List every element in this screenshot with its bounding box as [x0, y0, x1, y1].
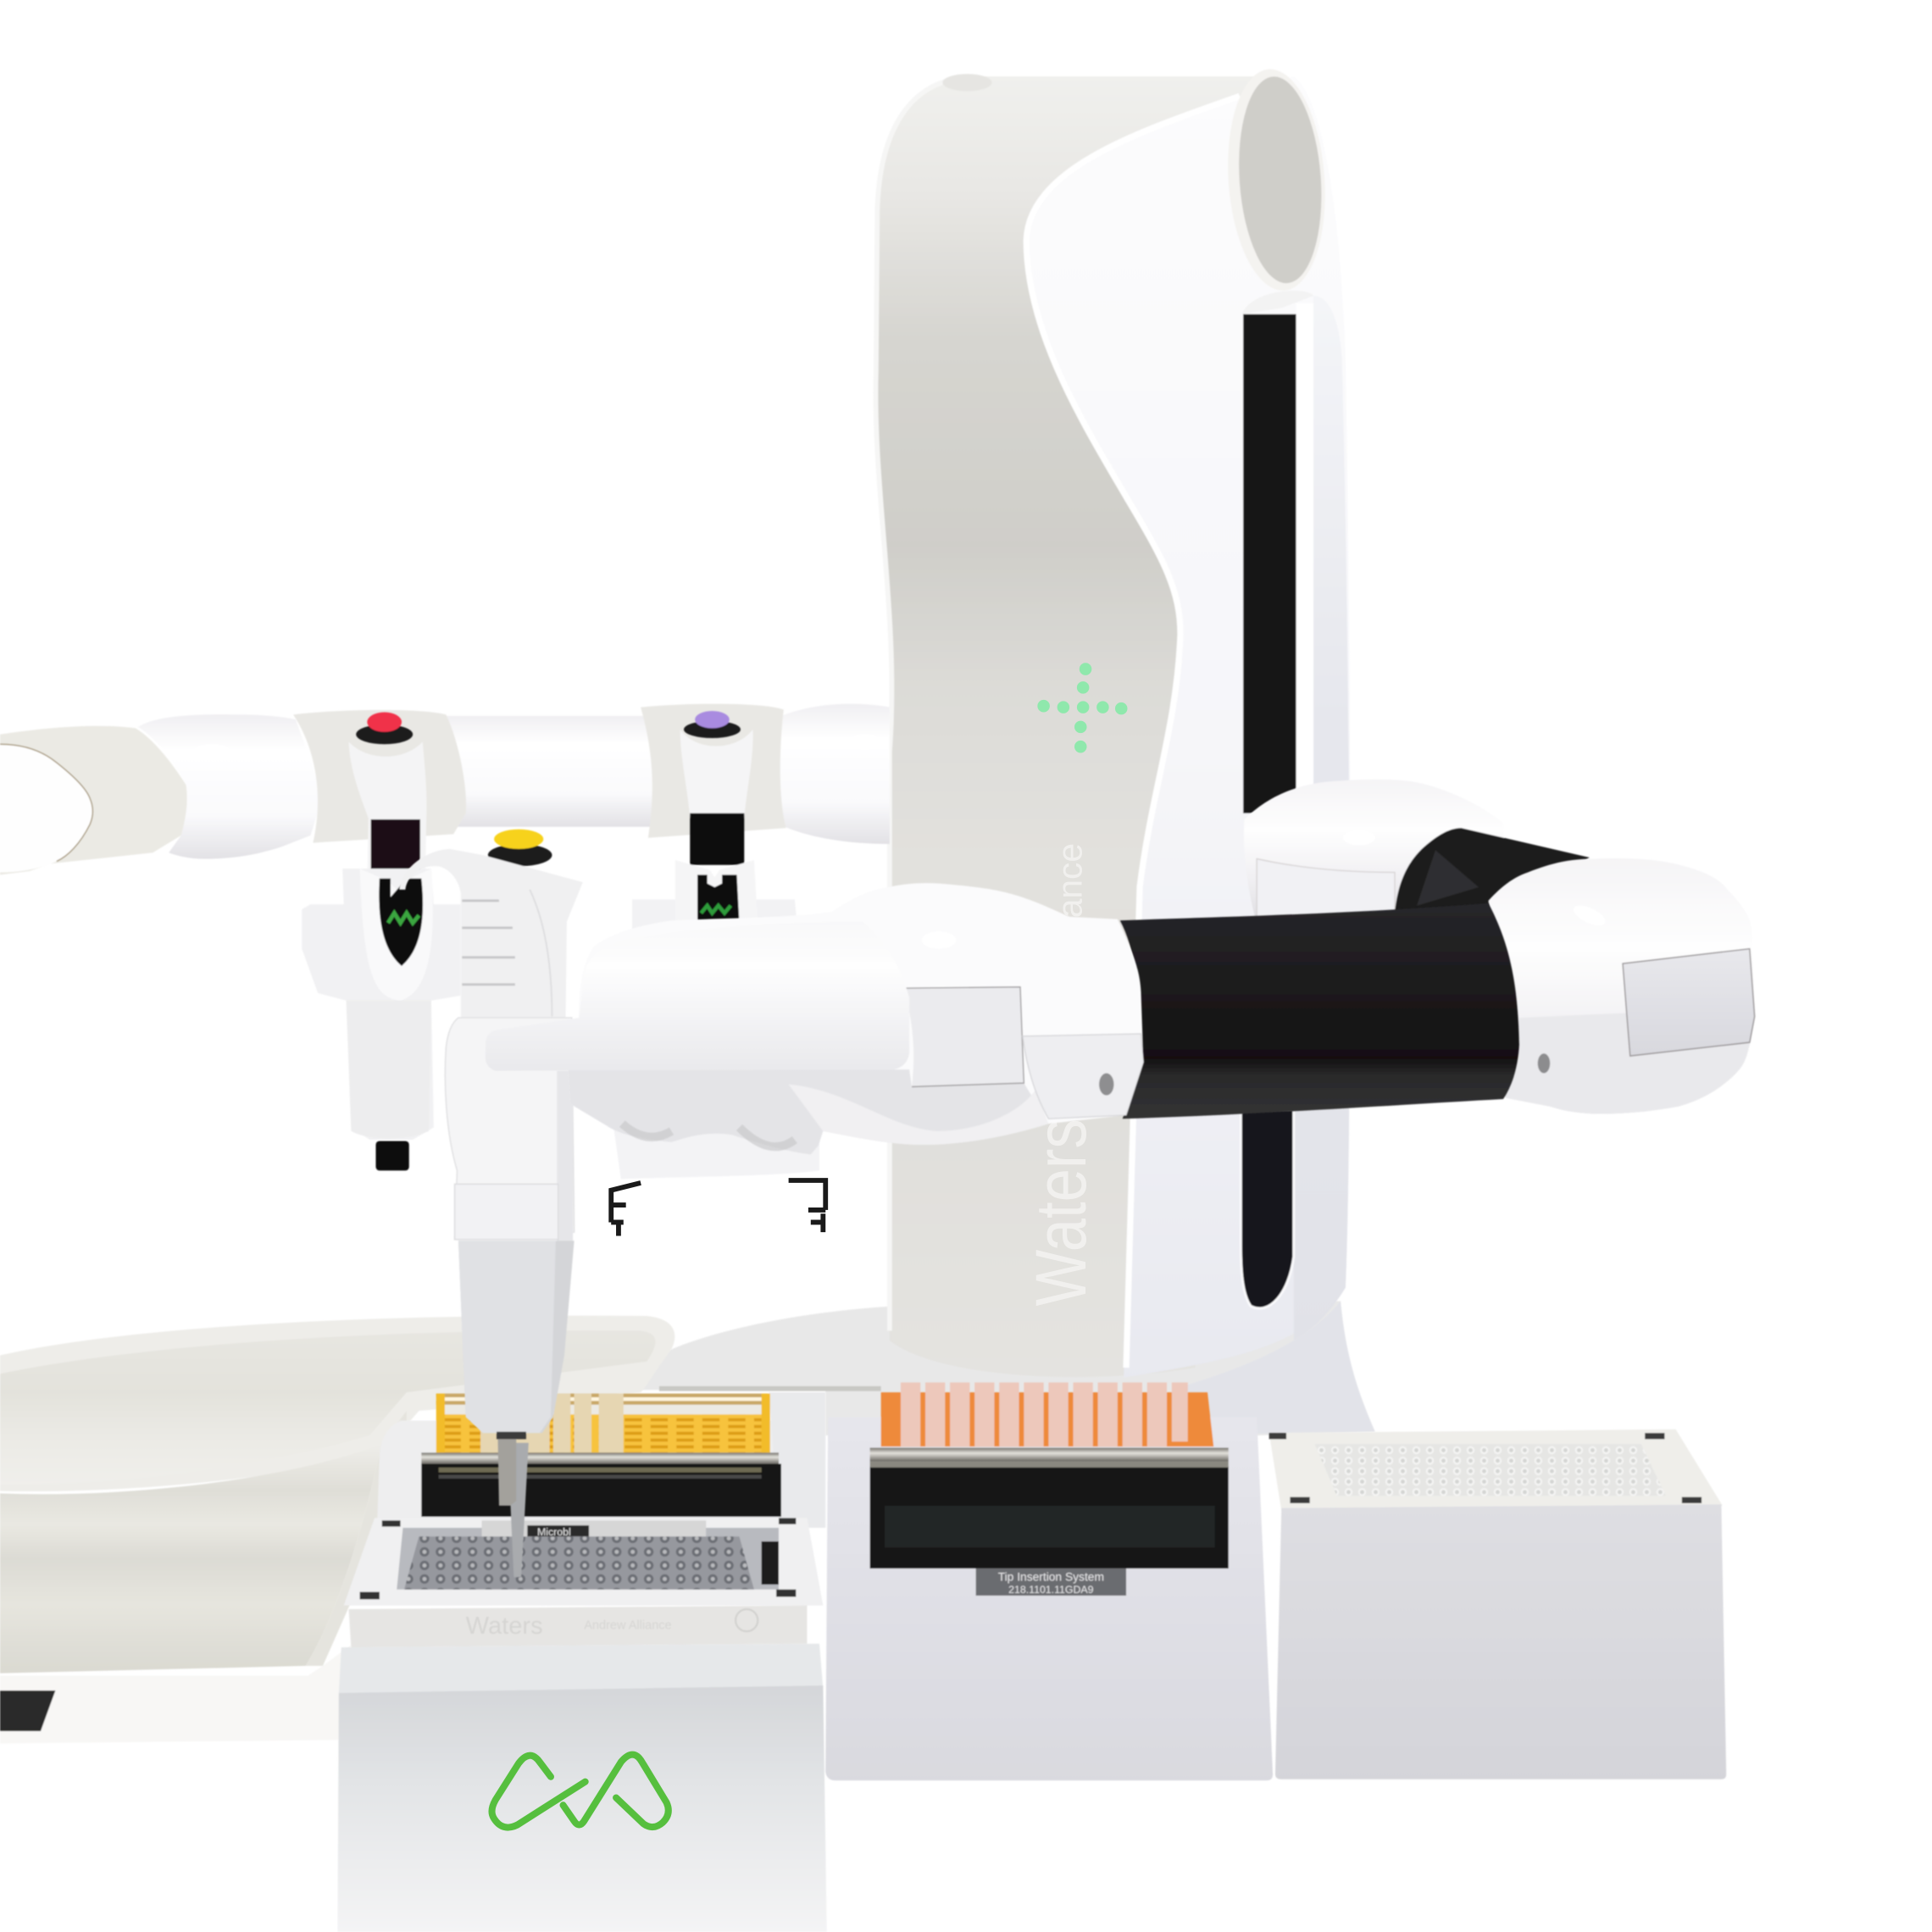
holder: [302, 869, 461, 1140]
box front: [337, 1685, 827, 1932]
black window: [870, 1466, 1229, 1568]
tower base: [622, 1302, 1375, 1435]
lower barrel: [458, 1241, 575, 1433]
tray bowl wall: [0, 1444, 382, 1674]
backing: [439, 1394, 769, 1452]
head: [680, 730, 753, 819]
cap with bracket: [486, 922, 909, 1071]
shoulder lower right: [1023, 1034, 1143, 1119]
underside swoosh: [789, 1085, 1048, 1145]
collar red: [293, 710, 466, 843]
black window: [421, 1463, 781, 1517]
yellow rack: [439, 1414, 766, 1452]
active pipette: [399, 830, 583, 1577]
elbow panel: [1623, 949, 1755, 1056]
module: left front: Andrew Alliance: [584, 1618, 672, 1632]
roller: [870, 1448, 1229, 1462]
disc: [1221, 66, 1332, 294]
LED plus indicator: [1037, 663, 1127, 752]
corner clips: [360, 1518, 796, 1599]
nozzle: [375, 1141, 409, 1170]
tip insertion label: [976, 1568, 1126, 1596]
cream tips: [480, 1394, 624, 1452]
pivot: [1099, 1074, 1113, 1096]
right sliver: [557, 1071, 573, 1243]
top face: [1269, 1430, 1723, 1511]
forearm outer shell: [568, 883, 1143, 1154]
lower shade: [1506, 1013, 1750, 1113]
orange rack: [881, 1392, 1213, 1446]
base plate: [0, 1645, 351, 1744]
pipette: red: [302, 712, 461, 1170]
shoulder bulge highlight: [922, 931, 956, 949]
box: [825, 1417, 1273, 1780]
gripper: [611, 1127, 825, 1235]
underside: [568, 1069, 1048, 1154]
waste tray: [0, 1316, 675, 1744]
corner clips: [1269, 1433, 1702, 1503]
lower joint panel: [1257, 858, 1395, 918]
shell: [377, 1421, 823, 1528]
grip ridges: [462, 901, 515, 985]
tower top nub: [942, 74, 992, 92]
gripper fingers: [611, 1180, 825, 1235]
wing holder: [632, 899, 798, 939]
carbon forearm tube: [1120, 903, 1519, 1119]
clear plate: [1315, 1444, 1666, 1496]
strip brand: Waters: [466, 1613, 543, 1640]
module: middle: [825, 1382, 1273, 1780]
tower brand text: Waters: [1021, 1119, 1101, 1306]
box: [1275, 1504, 1726, 1779]
modules: [337, 1382, 1726, 1932]
panel right shade: [1294, 296, 1350, 1341]
tray rim: [0, 1316, 675, 1491]
upper elbow joint: [1244, 780, 1590, 924]
pipe: [443, 716, 659, 827]
screen: [690, 813, 744, 865]
tip insertion label: Tip Insertion System: [998, 1570, 1104, 1584]
tray inner: [0, 1330, 656, 1485]
tower white panel: [1026, 76, 1350, 1378]
tower brand text: [1021, 843, 1101, 1306]
plate label: [482, 1520, 706, 1538]
sleeve tube end: [0, 744, 92, 872]
module: right: [1269, 1430, 1726, 1779]
tip: [508, 1443, 529, 1577]
roller: [421, 1452, 779, 1463]
tower slot: [1242, 291, 1313, 813]
pink tips: [901, 1382, 1188, 1446]
module: left front: [337, 1518, 827, 1932]
ejector: [497, 1435, 516, 1506]
tower grey body: [875, 76, 1294, 1377]
top deck: [344, 1518, 823, 1606]
upper body: [445, 1018, 575, 1238]
bulb left: [138, 714, 323, 858]
logo: green ribbon mark: [492, 1755, 669, 1828]
upper carbon tube: [1395, 828, 1590, 912]
pipette: purple: [632, 711, 798, 939]
bevel: [339, 1644, 823, 1693]
clip: [675, 860, 758, 924]
gripper body: [613, 1127, 819, 1180]
tower lower slot: [1241, 1109, 1294, 1308]
plate label: Microbl: [537, 1526, 571, 1538]
right bulb: [770, 704, 890, 844]
collar purple: [641, 704, 786, 838]
module: left rear: [377, 1392, 825, 1528]
cylinder: [347, 1001, 431, 1139]
elbow: [1489, 858, 1755, 1113]
well plate: [397, 1528, 779, 1590]
tray bowl side: [306, 1411, 407, 1666]
sleeve gap line: [0, 744, 92, 861]
plunger button: [488, 844, 552, 866]
joint panel: [903, 987, 1024, 1086]
front strip: [349, 1606, 807, 1647]
tower brand text: ance: [1051, 843, 1090, 918]
cream sleeve: [0, 726, 187, 874]
tower column: [875, 66, 1350, 1378]
underside bumps: [622, 1124, 795, 1146]
finger hook and handle: [399, 849, 583, 1023]
gold frame: [436, 1394, 769, 1405]
base plate knob: [0, 1690, 55, 1731]
strip button: [736, 1609, 758, 1631]
band: [455, 1184, 558, 1240]
upper arm: [0, 704, 890, 874]
tip insertion label: 218.1101.11GDA9: [1008, 1584, 1094, 1596]
forearm: [486, 883, 1143, 1154]
